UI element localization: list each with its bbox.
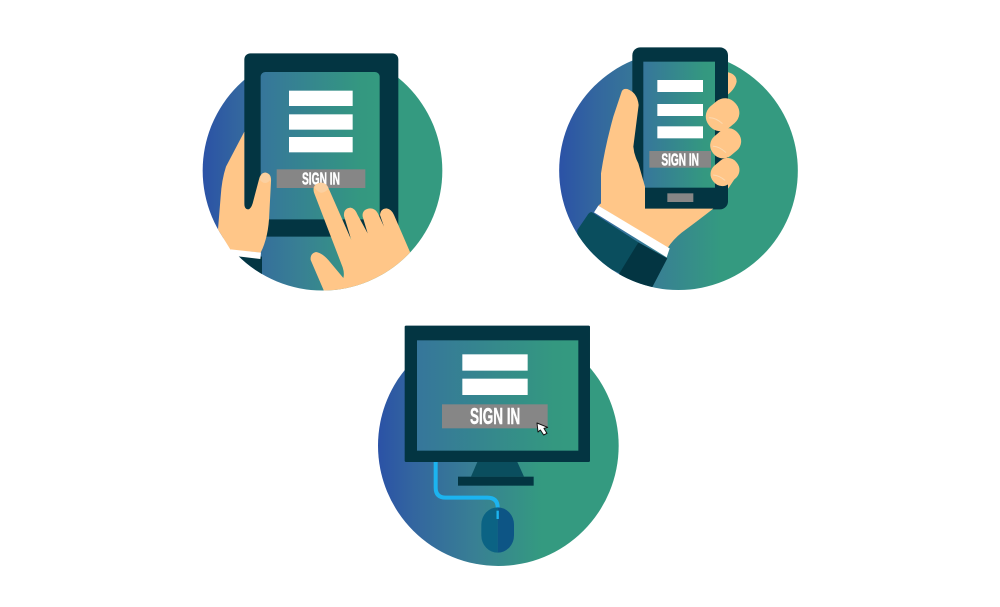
left shirt cuff (230, 249, 261, 259)
tablet background circle (202, 78, 442, 290)
tablet login fields (289, 91, 353, 152)
computer mouse (481, 507, 514, 553)
tablet device (244, 53, 398, 237)
phone sign in button: SIGN IN (661, 149, 699, 169)
mouse cursor (537, 423, 548, 435)
finger two (705, 123, 746, 163)
tablet screen (261, 72, 380, 219)
right hand pointing (310, 182, 410, 290)
phone sleeve (577, 212, 667, 288)
desktop background circle (378, 368, 619, 566)
finger one (700, 93, 745, 137)
finger three (706, 153, 744, 191)
hand behind phone (725, 72, 738, 188)
phone shirt cuff (594, 206, 670, 257)
phone device (632, 47, 728, 209)
phone screen (643, 62, 715, 188)
phone home button (667, 193, 693, 202)
phone sign in button (649, 149, 711, 169)
tablet sign in button: SIGN IN (302, 168, 340, 188)
phone holding hand (598, 89, 713, 248)
left sleeve (238, 256, 262, 274)
monitor stand (471, 462, 524, 477)
desktop sign in button: SIGN IN (470, 403, 520, 429)
monitor frame (405, 326, 590, 462)
mouse cable (436, 462, 498, 508)
panel: desktop sign in (378, 325, 619, 566)
tablet sign in button (277, 168, 365, 188)
phone background circle (559, 51, 798, 290)
panel: tablet sign in (203, 51, 442, 293)
desktop login fields (462, 354, 528, 395)
phone login fields (657, 80, 703, 138)
left hand holding tablet (218, 132, 271, 253)
phone fingers (700, 93, 746, 191)
panel: phone sign in (559, 47, 798, 290)
desktop sign in button (442, 403, 548, 429)
monitor screen (417, 340, 578, 451)
left thumb nail (260, 173, 270, 183)
monitor base (458, 477, 534, 486)
